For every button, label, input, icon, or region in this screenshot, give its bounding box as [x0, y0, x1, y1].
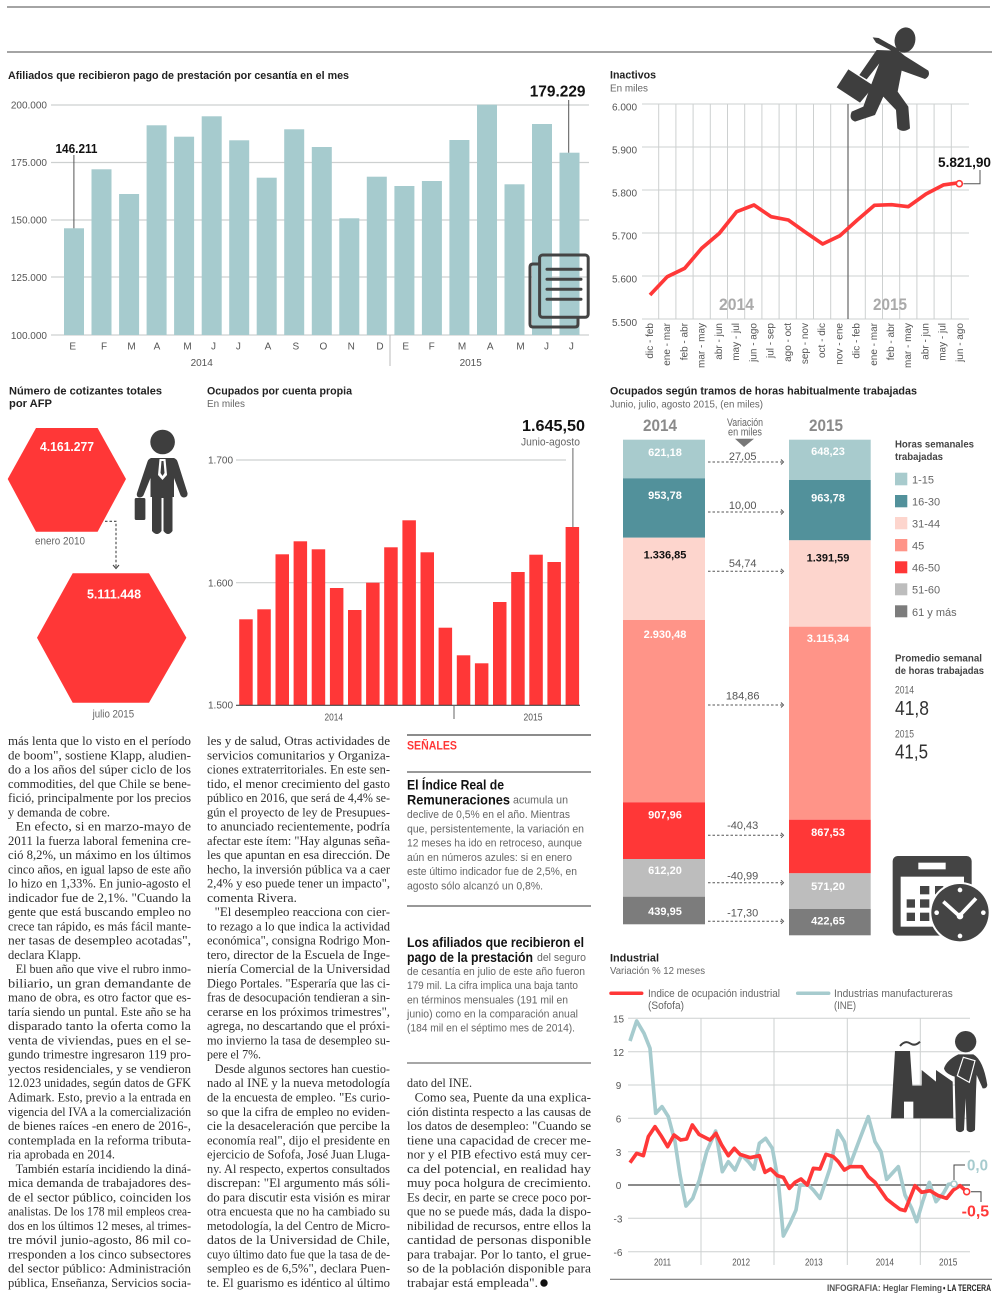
panel: cotizantes AFP	[8, 386, 188, 721]
y axis labels: 5.700	[612, 232, 637, 242]
article text: column 2	[207, 734, 391, 1290]
article text: column 3: para trabajar. Por lo tanto, el grue-	[407, 1247, 591, 1261]
sidebar item: índice real de remuneraciones	[407, 776, 584, 892]
stacked bar 2014: 2.930,48	[644, 629, 686, 641]
promedio semanal: 2015	[895, 729, 914, 741]
panel: inactivos line chart	[610, 25, 991, 368]
article text: column 2: gún el proyecto de ley de Presupues-	[207, 805, 390, 819]
article text: column 3: nibilidad de recursos, entre ellos la	[407, 1219, 592, 1233]
article text: column 2: discrepan: "El argumento más sóli-	[207, 1176, 390, 1190]
y axis labels: 5.900	[612, 146, 637, 156]
period labels: mar - may	[696, 323, 708, 368]
hexagon: enero 2010	[8, 428, 126, 532]
y axis labels: 150.000	[11, 216, 47, 226]
article text: column 2: metodología, la del Centro de Micro-	[207, 1219, 390, 1233]
y axis labels	[208, 456, 233, 712]
stacked bar 2014: 621,18	[648, 447, 682, 459]
article text: column 2: ny. Al respecto, expertos consultados	[207, 1162, 390, 1176]
period labels: jul - sep	[766, 323, 776, 359]
year labels: 2013	[805, 1258, 823, 1268]
article text: column 3: ca del potencial, en realidad hay	[407, 1162, 592, 1176]
stacked bar 2014: 907,96	[648, 810, 682, 822]
article text: column 2: agrega, no descartando que el próxi-	[207, 1019, 390, 1033]
article text: column 1: mica demanda de trabajadores des-	[8, 1176, 191, 1190]
article text: column 1: venta de viviendas, pues en el se-	[8, 1034, 191, 1048]
y axis labels	[613, 1014, 624, 1259]
year labels: 2014	[876, 1258, 894, 1268]
callout: 146.211	[56, 141, 98, 228]
subtitle: variación: Variación % 12 meses	[610, 965, 705, 977]
period labels: sep - nov	[800, 323, 811, 364]
article text: column 2: nado al INE y la nueva metodología	[207, 1076, 391, 1090]
month labels: A	[265, 342, 272, 352]
legend: horas semanales: 31-44	[912, 518, 940, 530]
month labels: 2014	[191, 358, 213, 369]
article text: column 2: so que la cifra de empleo no eviden-	[207, 1105, 390, 1119]
article text: column 2: tero, director de la Escuela de Inge-	[207, 948, 390, 962]
article text: column 1: ció 8,2%, un máximo en los últimos	[8, 848, 191, 862]
stacked bar 2014	[623, 440, 705, 924]
article text: column 1: de boom", sostiene Klapp, aludien-	[8, 748, 191, 762]
article text: column 2: te. El guarismo es idéntico al último	[207, 1276, 390, 1290]
month labels: F	[429, 342, 435, 352]
period labels: abr - jun	[920, 323, 932, 360]
period labels: ago - oct	[783, 323, 794, 362]
article text: column 2: mo invierno la tasa de desempleo su-	[207, 1034, 390, 1048]
y axis labels: 100.000	[11, 331, 47, 342]
chart title: cuenta propia: Ocupados por cuenta propia	[207, 386, 353, 398]
article text: column 1: yectos residenciales, y se vendieron	[8, 1062, 191, 1076]
series: industrias manufactureras	[630, 1021, 954, 1236]
sidebar item: afiliados: pago de la prestación	[407, 949, 533, 965]
stacked bar 2015: 3.115,34	[807, 633, 850, 645]
article text: column 2: fras de desocupación tendieran a sin-	[207, 991, 390, 1005]
hexagon: julio 2015: 5.111.448	[87, 588, 141, 602]
chart title: industrial: Industrial	[610, 953, 659, 965]
variation values: -40,99	[727, 870, 758, 882]
article text: column 3: tiene una capacidad de crecer me-	[407, 1133, 591, 1147]
month labels: O	[320, 342, 328, 352]
hexagon: julio 2015	[37, 573, 186, 703]
article text: column 1: Adimark. Esto, previo a la entrada en	[8, 1090, 191, 1104]
period labels: dic - feb	[645, 323, 656, 359]
subtitle: en miles: En miles	[207, 398, 245, 410]
article text: column 3: que no se puede más, dada la dispo-	[407, 1205, 591, 1219]
sidebar item: afiliados: Los afiliados que recibieron el	[407, 934, 584, 950]
sidebar item: afiliados: junio) como en la comparación anual	[406, 1009, 578, 1021]
sidebar item: afiliados: de cesantía en julio de este año fueron	[407, 966, 585, 978]
callout: 1.645,50	[521, 418, 585, 527]
icon: calendar and clock	[893, 856, 991, 943]
y axis labels: 6.000	[612, 102, 637, 114]
article text: column 3: ción distinta respecto a las causas de	[407, 1105, 591, 1119]
article text: column 1: y demanda de cobre.	[8, 805, 110, 819]
article text: column 2: comenta Rivera.	[207, 891, 297, 905]
dashed arrow	[105, 521, 119, 568]
article text: column 2: tido, el menor crecimiento del gasto	[207, 777, 390, 791]
footer credit	[610, 1279, 992, 1293]
stacked bar 2015: 963,78	[811, 493, 845, 505]
article text: column 1: del sector público: Administración	[8, 1262, 191, 1276]
y axis labels	[11, 100, 47, 342]
legend: Industrias manufactureras	[834, 988, 953, 1000]
article text: column 3: cantidad de personas disponible	[407, 1233, 591, 1247]
callout: 1.645,50: Junio-agosto	[521, 437, 580, 449]
article text: column 2: datos de la Universidad de Chile,	[207, 1233, 390, 1247]
y axis labels: 3	[616, 1148, 622, 1159]
legend: horas semanales: 45	[912, 541, 924, 553]
month labels: N	[348, 342, 355, 352]
sidebar item: índice real de remuneraciones: aún en números azules: si en enero	[407, 852, 572, 864]
y axis labels: 5.800	[612, 188, 637, 200]
sidebar item: índice real de remuneraciones: declive de 0,5% en el año. Mientras	[407, 809, 570, 821]
period labels: feb - abr	[886, 322, 897, 360]
article text: column 2: cie la desaceleración que percibe la	[207, 1119, 391, 1133]
stacked bar 2014: 1.336,85	[644, 549, 686, 561]
article text: column 2: servicios comunitarios y Organiza-	[207, 748, 390, 762]
article text: column 1: contemplada en la reforma tributa-	[8, 1133, 191, 1147]
sidebar item: índice real de remuneraciones: El Índice Real de	[407, 776, 504, 792]
y axis labels: -6	[614, 1248, 623, 1259]
period labels: ene - mar	[662, 322, 673, 366]
bars	[239, 520, 579, 705]
promedio semanal: Promedio semanal	[895, 652, 982, 664]
article text: column 2: "El desempleo reacciona con cier-	[215, 905, 390, 919]
article text: column 2: económica", consigna Rodrigo Mon-	[207, 934, 390, 948]
month labels: D	[376, 342, 384, 352]
sidebar item: afiliados: (184 mil en el séptimo mes de 2014).	[407, 1023, 575, 1035]
y axis labels: 15	[613, 1014, 624, 1026]
article text: column 2: 2,4% y eso puede tener un impacto",	[207, 877, 390, 891]
year labels: 2015	[524, 712, 543, 724]
article text: column 1: commodities, del que Chile se bene-	[8, 777, 191, 791]
sidebar heading: señales: SEÑALES	[407, 738, 457, 752]
variation values: -17,30	[727, 908, 758, 920]
year labels: 2015	[939, 1258, 958, 1268]
sidebar item: índice real de remuneraciones: este último indicador fue de 2,5%, en	[407, 866, 577, 878]
month labels: S	[292, 342, 299, 352]
article text: column 1: vigencia del IVA a la comercialización	[8, 1105, 191, 1119]
panel: industrial line chart	[610, 953, 990, 1268]
article text: column 3: muy poca holgura de crecimiento.	[407, 1176, 591, 1190]
footer credit: INFOGRAFIA: Heglar Fleming	[827, 1283, 942, 1293]
icon: documents	[530, 255, 588, 327]
article text: column 1: El buen año que vive el rubro inmo-	[16, 962, 191, 976]
article text: column 3: los datos de desempleo: "Cuando se	[407, 1119, 591, 1133]
article text: column 1: 12.023 unidades, según datos de GFK	[8, 1076, 191, 1090]
article text: column 1: ner tasas de desempleo acotadas",	[8, 934, 191, 948]
variation heading: Variación	[727, 417, 763, 429]
subtitle: en miles: En miles	[610, 82, 648, 94]
callout: 5.821,90: 5.821,90	[938, 154, 991, 170]
chart title: cotizantes: Número de cotizantes totales	[9, 386, 162, 398]
chart title: afiliados: Afiliados que recibieron pago de prestación por cesantía en el mes	[8, 70, 349, 82]
article text: column 2: ciones extraterritoriales. En este sen-	[207, 762, 390, 776]
stacked bar 2015: 571,20	[811, 881, 845, 893]
article text: column 2: afectar este ítem: "Hay algunas seña-	[207, 834, 390, 848]
article text: column 1: de el sector público, coinciden los	[8, 1190, 191, 1204]
legend: horas semanales: 1-15	[912, 474, 934, 486]
article text: column 2: niería Comercial de la Universidad	[207, 962, 390, 976]
year labels	[654, 1258, 958, 1268]
article text: column 1: disparado tanto la oferta como la	[8, 1019, 192, 1033]
article text: column 3: trabajar está empleada".	[407, 1276, 538, 1290]
year labels: 2011	[654, 1258, 671, 1268]
variation values: 27,05	[729, 451, 756, 463]
article text: column 1: mano de obra, es otro factor que es-	[8, 991, 191, 1005]
month labels: A	[487, 342, 494, 352]
stacked bar 2014: 612,20	[648, 865, 682, 877]
article text: column 2: do para discutir esta visión es mirar	[207, 1190, 390, 1204]
sidebar item: índice real de remuneraciones: Remuneraciones	[407, 792, 510, 808]
chart title: inactivos: Inactivos	[610, 70, 656, 82]
panel: ocupados por cuenta propia bar chart	[207, 386, 585, 724]
legend: Indice de ocupación industrial	[648, 988, 780, 1000]
article text: column 3: dato del INE.	[407, 1076, 472, 1090]
article text: column 2: to anunciado recientemente, podría	[207, 820, 391, 834]
y axis labels: 1.600	[208, 578, 233, 589]
variation values	[726, 451, 760, 920]
article text: column 2: sempleo es de 6,5%", declara Puen-	[207, 1262, 390, 1276]
sidebar item: afiliados	[406, 934, 586, 1035]
icon: factory and worker	[891, 1031, 987, 1132]
promedio semanal: de horas trabajadas	[895, 665, 984, 677]
period labels: oct - dic	[817, 323, 828, 358]
column heading 2015: 2015	[809, 417, 843, 435]
year labels: 2014	[324, 712, 343, 724]
y axis labels: 0	[616, 1181, 622, 1192]
article text: column 1: gente que está buscando empleo no	[8, 905, 191, 919]
period labels: dic - feb	[852, 323, 862, 359]
article text: column 3: Como sea, Puente da una explica-	[415, 1090, 591, 1104]
article text: column 1: fició, principalmente por los precios	[8, 791, 191, 805]
period labels: jun - ago	[748, 323, 760, 363]
callout: 179.229	[530, 84, 586, 153]
month labels: J	[544, 342, 549, 352]
article text: column 2: les y de salud, Otras actividades de	[207, 734, 390, 748]
sidebar item: afiliados: 179 mil. La cifra implica una baja tanto	[407, 980, 578, 992]
end point callout: -0,5: -0,5	[962, 1204, 990, 1220]
stacked bar 2015: 1.391,59	[807, 552, 849, 564]
period labels: jun - ago	[955, 323, 966, 363]
article text: column 2: economía real", dijo el presidente en	[207, 1133, 390, 1147]
sidebar item: índice real de remuneraciones: 12 meses ha ido en retroceso, aunque	[407, 838, 582, 850]
y axis labels: 200.000	[11, 100, 47, 112]
stacked bar 2015	[789, 440, 871, 935]
period labels: mar - may	[903, 323, 914, 368]
panel: señales sidebar	[406, 735, 591, 1063]
article text: column 2: ejercicio de Sofofa, José Juan Lluga-	[207, 1148, 390, 1162]
variation values: -40,43	[727, 820, 758, 832]
y axis labels: 6	[616, 1114, 622, 1126]
series: índice de ocupación industrial	[630, 1125, 967, 1211]
variation heading: en miles	[728, 426, 762, 438]
legend: horas semanales: Horas semanales	[895, 438, 974, 450]
icon: running businessman	[837, 25, 929, 131]
promedio semanal: 41,5	[895, 740, 928, 764]
month labels: J	[211, 342, 216, 352]
month labels: J	[236, 342, 241, 352]
month labels: M	[127, 342, 136, 352]
month labels: F	[101, 342, 107, 352]
panel: cotizantes AFP: por AFP	[9, 398, 52, 410]
article text: column 1: También estaría incidiendo la diná-	[16, 1162, 191, 1176]
sidebar item: índice real de remuneraciones: que, persistentemente, la variación en	[407, 823, 584, 835]
line series	[650, 181, 962, 295]
article text: column 1: de bienes raíces -en enero de 2016-,	[8, 1119, 191, 1133]
callout: 1.645,50: 1.645,50	[522, 418, 585, 435]
article text: column 3: Es decir, en parte se crece poco por-	[407, 1190, 591, 1204]
label: enero 2010: enero 2010	[35, 536, 85, 548]
stacked bar 2015: 422,65	[811, 916, 845, 928]
article text: column 1: indicador fue de 2,1%. "Cuando la	[8, 891, 192, 905]
stacked bar 2015: 867,53	[811, 827, 845, 839]
article text: column 2: público en 2016, que será de 4,4% se-	[207, 791, 390, 805]
month labels: A	[154, 342, 161, 352]
article text: column 2: otra encuesta que no ha cambiado su	[207, 1205, 390, 1219]
promedio semanal	[895, 652, 984, 764]
month labels: M	[183, 342, 192, 352]
callout: 179.229: 179.229	[530, 84, 586, 100]
article text: column 1: En efecto, si en marzo-mayo de	[16, 820, 191, 834]
article text: column 2: cerarse en los próximos trimestres",	[207, 1005, 390, 1019]
article text: column 1	[8, 734, 192, 1290]
sidebar item: índice real de remuneraciones: acumula un	[513, 794, 568, 806]
month labels: M	[458, 342, 466, 352]
y axis labels: 9	[616, 1081, 622, 1092]
column heading 2014: 2014	[643, 417, 678, 435]
article text: column 1: pública, Enseñanza, Servicios socia-	[8, 1276, 191, 1290]
year labels	[324, 712, 543, 724]
period labels: feb - abr	[680, 322, 690, 360]
legend: horas semanales: trabajadas	[895, 451, 943, 463]
year labels	[719, 296, 907, 314]
period labels: ene - mar	[869, 322, 880, 366]
article text: column 2: de la encuesta de empleo. "Es curio-	[207, 1090, 390, 1104]
article text: column 1: biliario, un gran demandante de	[8, 976, 191, 990]
article text: column 1: más lenta que lo visto en el período	[8, 734, 191, 748]
period labels: may - jul	[938, 323, 948, 361]
icon: businessman with briefcase	[135, 430, 188, 534]
panel: afiliados bar chart	[8, 70, 589, 369]
month labels: 2015	[460, 358, 482, 369]
legend: horas semanales: 51-60	[912, 585, 940, 597]
end point callout: -0,5	[962, 1189, 990, 1220]
article text: column 2: to rezago a lo que indica la actividad	[207, 919, 390, 933]
variation values: 184,86	[726, 690, 760, 702]
article text: column 1: 2011 la fuerza laboral femenina cre-	[8, 834, 191, 848]
variation arrows	[708, 460, 784, 924]
month labels: E	[402, 342, 409, 352]
article text: column 2: hecho, la inversión pública va a caer	[207, 862, 390, 876]
bars	[64, 105, 580, 335]
y axis labels: 5.600	[612, 274, 637, 286]
article text: column 2: les que apuntan en esa dirección. De	[207, 848, 390, 862]
article text: column 3: so de la población disponible para	[407, 1262, 592, 1276]
article text: column 1: dos en los últimos 12 meses, al trimes-	[8, 1219, 191, 1233]
variation heading	[727, 417, 763, 447]
end point callout: 0,0	[951, 1158, 988, 1187]
period labels	[645, 322, 966, 368]
y axis labels	[612, 102, 637, 329]
article text: column 1: declara Klapp.	[8, 948, 81, 962]
month labels	[69, 342, 574, 369]
label: julio 2015: julio 2015	[92, 709, 134, 721]
article text: column 1: taría siendo un puntal. Este año se ha	[8, 1005, 192, 1019]
article text: column 1: analistas. De los 178 mil empleos crea-	[8, 1205, 191, 1219]
legend: horas semanales: 61 y más	[912, 607, 957, 619]
period labels: may - jul	[731, 323, 742, 361]
article text: column 1: crece tan rápido, es más fácil mante-	[8, 919, 191, 933]
y axis labels: 5.500	[612, 318, 637, 329]
sidebar item: índice real de remuneraciones: agosto sólo alcanzó un 0,8%.	[407, 880, 543, 892]
end point callout: 0,0: 0,0	[967, 1158, 988, 1174]
stacked bar 2014: 953,78	[648, 490, 682, 502]
article text: column 3: nor y el PIB efectivo está muy cer-	[407, 1148, 591, 1162]
callout: 146.211: 146.211	[56, 141, 98, 156]
article text: column 1: cinco años, en igual lapso de este año	[8, 862, 191, 876]
stacked bar 2014: 439,95	[648, 906, 682, 918]
legend: horas semanales: 46-50	[912, 563, 940, 575]
variation values: 10,00	[729, 500, 756, 512]
article text: column 2: Desde algunos sectores han cuestio-	[215, 1062, 390, 1076]
legend: (Sofofa)	[648, 1000, 684, 1012]
y axis labels: 12	[613, 1048, 624, 1059]
legend	[611, 988, 953, 1012]
sidebar item: afiliados: del seguro	[537, 952, 586, 964]
year labels: 2015	[873, 296, 907, 314]
stacked bar 2015: 648,23	[811, 446, 845, 458]
callout: 5.821,90	[938, 154, 991, 184]
y axis labels: 125.000	[11, 273, 47, 284]
legend: horas semanales: 16-30	[912, 497, 940, 509]
article text: column 1: rresponden a los cinco subsectores	[8, 1247, 191, 1261]
year labels: 2012	[732, 1258, 750, 1268]
article text: column 1: do a los años del súper ciclo de los	[8, 762, 191, 776]
article text: column 3	[407, 1076, 592, 1290]
article text: column 2: pere el 7%.	[207, 1048, 261, 1062]
y axis labels: 1.500	[208, 701, 233, 712]
year labels: 2014	[719, 296, 755, 314]
article text: column 2: cuyo último dato fue que la tasa de de-	[207, 1247, 390, 1261]
period labels: nov - ene	[834, 323, 846, 365]
chart title: tramos de horas: Ocupados según tramos de horas habitualmente trabajadas	[610, 386, 917, 398]
promedio semanal: 41,8	[895, 697, 929, 720]
article text: column 1: tre móvil junio-agosto, 86 mil co-	[8, 1233, 191, 1247]
y axis labels: -3	[614, 1214, 623, 1226]
promedio semanal: 2014	[895, 685, 914, 697]
month labels: J	[569, 342, 574, 352]
sidebar item: afiliados: en términos mensuales (191 mil en	[407, 994, 568, 1006]
article text: column 2: Diego Portales. "Esperaría que las ci-	[207, 976, 390, 990]
article text: column 1: gundo trimestre ingresaron 119 pro-	[8, 1048, 191, 1062]
subtitle: periodo: Junio, julio, agosto 2015, (en miles)	[610, 399, 763, 411]
legend: (INE)	[834, 1000, 856, 1012]
hexagon: enero 2010: 4.161.277	[40, 440, 94, 454]
period labels: abr - jun	[714, 323, 725, 360]
month labels: E	[69, 342, 76, 352]
y axis labels: 1.700	[208, 456, 233, 467]
panel: tramos de horas stacked bars	[610, 386, 991, 943]
variation values: 54,74	[729, 558, 756, 570]
article text: column 1: lo hizo en 1,33%. En junio-agosto el	[8, 877, 192, 891]
legend: horas semanales	[895, 438, 974, 619]
month labels: M	[516, 342, 525, 352]
y axis labels: 175.000	[11, 158, 47, 169]
article text: column 1: ria aprobada en 2014.	[8, 1148, 115, 1162]
